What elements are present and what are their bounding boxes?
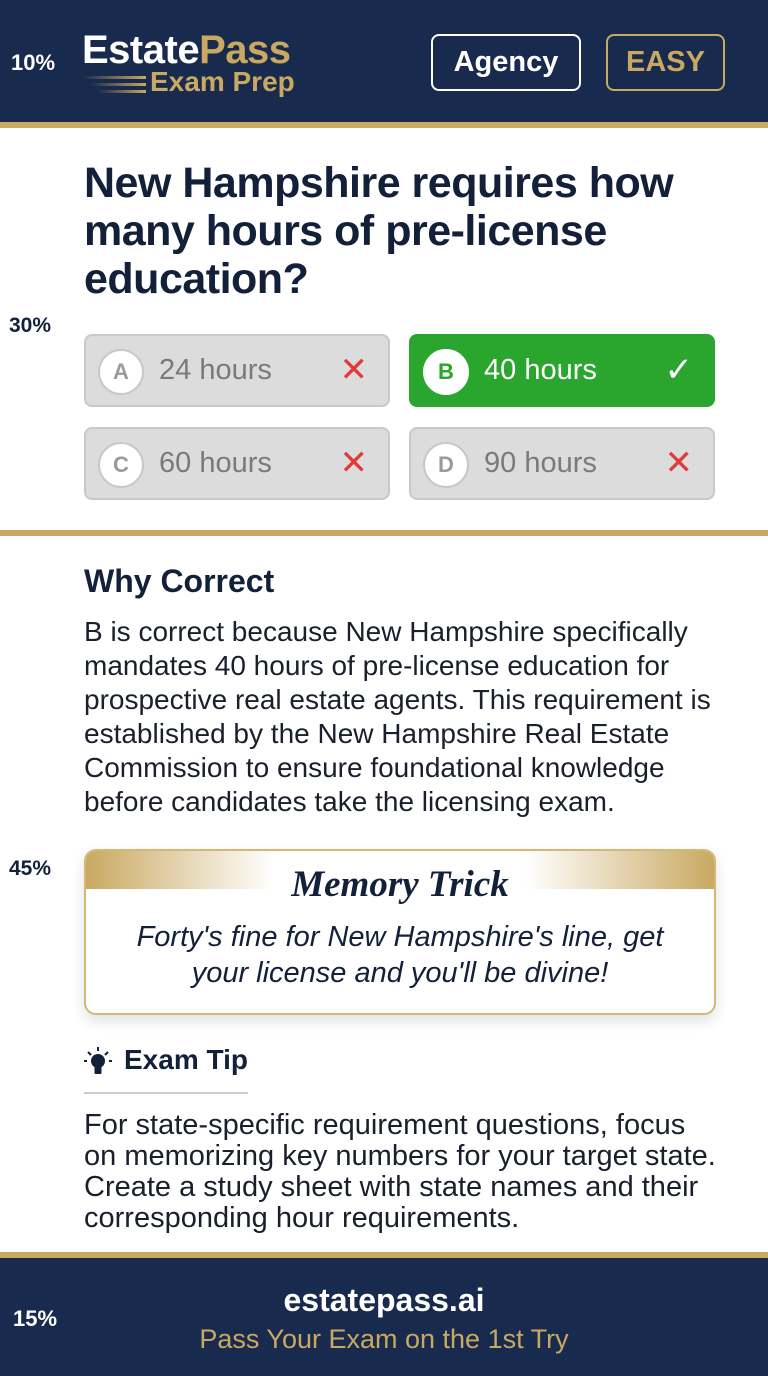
option D [409,427,715,500]
option D: ✕ [664,444,693,482]
option C [84,427,390,500]
option A [84,334,390,407]
percent label 30%: 30% [9,314,51,337]
option A: ✕ [340,351,368,389]
exam tip body: on memorizing key numbers for your target state. [84,1140,716,1172]
why correct body: Commission to ensure foundational knowledge [84,752,665,783]
footer site name: estatepass.ai [283,1282,484,1318]
exam tip body: corresponding hour requirements. [84,1202,519,1234]
memory trick heading: Memory Trick [291,864,509,905]
logo [82,28,295,97]
badge: EASY: EASY [626,46,705,78]
option A: 24 hours [159,354,272,386]
exam tip body: Create a study sheet with state names and their [84,1171,698,1203]
exam tip heading: Exam Tip [124,1044,248,1075]
why correct body: mandates 40 hours of pre-license education for [84,650,669,681]
badge: EASY [606,34,725,91]
why correct body: established by the New Hampshire Real Estate [84,718,669,749]
option D: D [438,452,454,477]
why correct body [84,616,711,817]
why correct body: prospective real estate agents. This requirement is [84,684,711,715]
exam tip body [84,1109,716,1234]
option C: ✕ [340,444,368,482]
memory trick box [84,849,716,1015]
option D: 90 hours [484,447,597,479]
percent label 45%: 45% [9,857,51,880]
badge: Agency: Agency [454,46,558,78]
header bar [0,0,768,128]
percent label 15%: 15% [13,1306,57,1331]
option C: 60 hours [159,447,272,479]
icon: lightbulb [84,1047,112,1074]
memory trick text: Forty's fine for New Hampshire's line, get your license and you'll be divine! [137,921,663,989]
why correct body: before candidates take the licensing exam. [84,786,615,817]
exam tip body: For state-specific requirement questions, focus [84,1109,685,1141]
logo: Exam Prep [150,66,295,97]
question title: New Hampshire requires how many hours of pre-license education? [84,159,673,303]
option B correct: B [438,359,454,384]
percent label 10%: 10% [11,50,55,75]
logo: EstatePass [82,28,290,72]
why correct body: B is correct because New Hampshire specifically [84,616,688,647]
why correct heading: Why Correct [84,563,274,599]
footer [0,1252,768,1376]
option C: C [113,452,129,477]
badge: Agency [431,34,581,91]
footer tagline: Pass Your Exam on the 1st Try [199,1324,569,1354]
option B correct [409,334,715,407]
option A: A [113,359,129,384]
option B correct: ✓ [664,351,693,389]
option B correct: 40 hours [484,354,597,386]
exam tip heading [84,1044,248,1094]
